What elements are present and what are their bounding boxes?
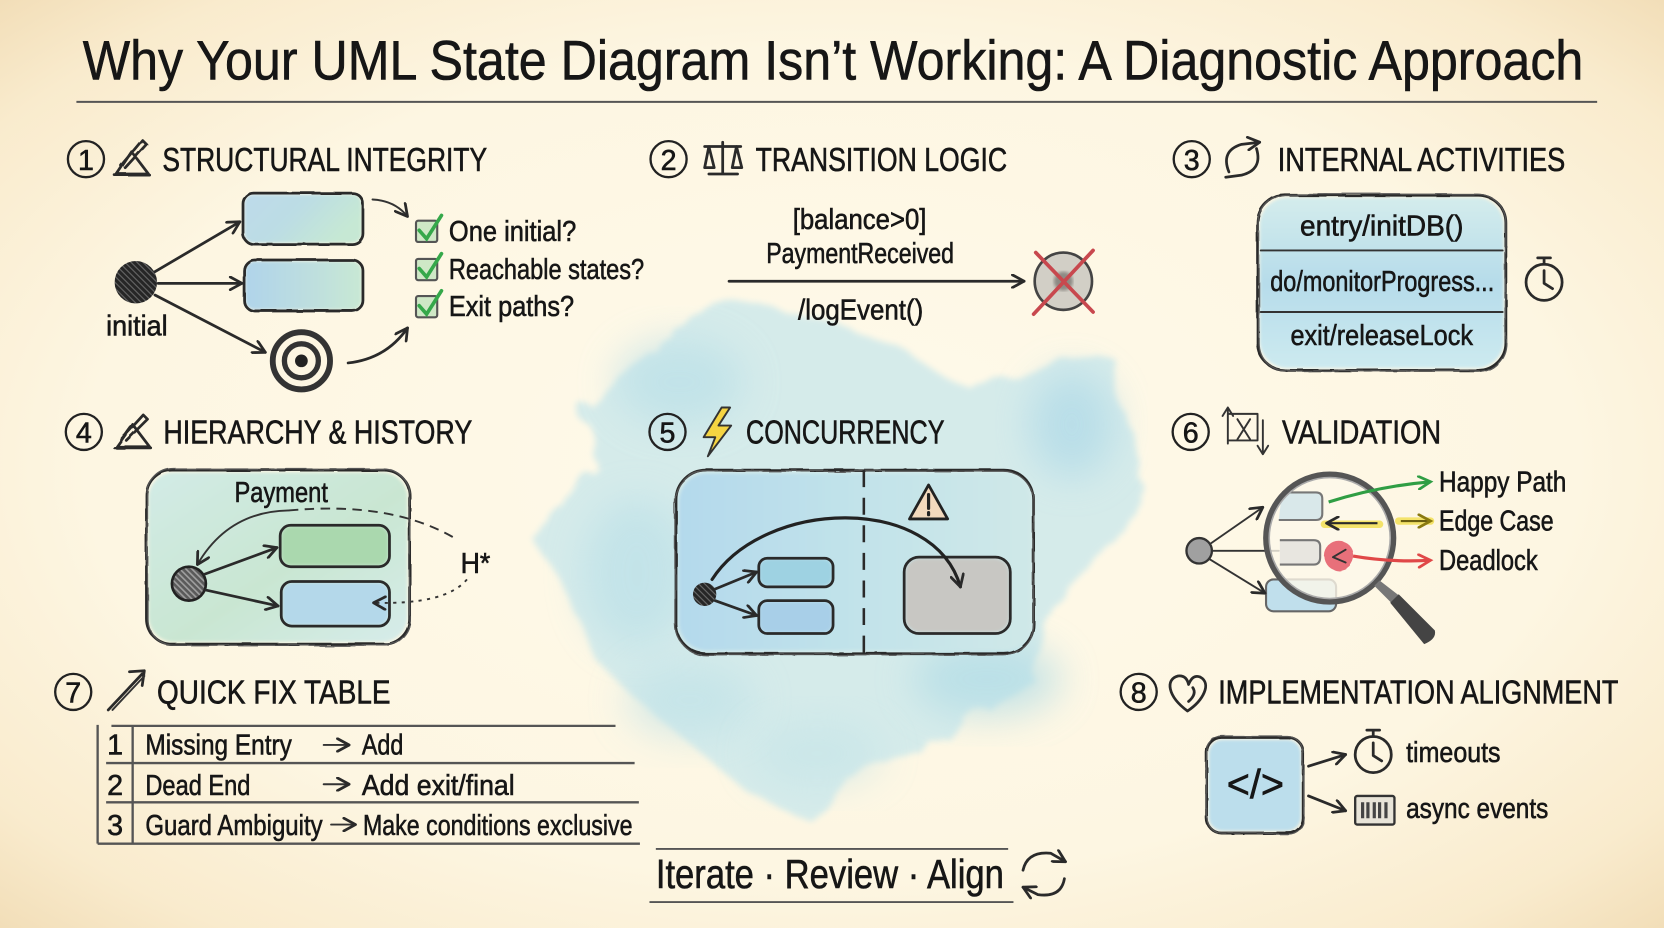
- code box: [1207, 736, 1303, 833]
- heading 4: HIERARCHY & HISTORY: [163, 414, 472, 451]
- panel 1: structural integrity: [68, 140, 644, 389]
- panel 7: quick fix table: [55, 671, 640, 844]
- activity box: exit/releaseLock: [1290, 320, 1474, 352]
- heading 6: [1173, 408, 1441, 454]
- fix table: 2: [107, 770, 123, 802]
- checklist: One initial?: [449, 216, 576, 248]
- activity box: do/monitorProgress...: [1270, 266, 1494, 298]
- fix table: 3: [107, 810, 123, 842]
- checklist: Exit paths?: [449, 291, 574, 323]
- panel 6: validation: [1173, 408, 1566, 644]
- guard text and arrow: [729, 204, 1024, 326]
- async events item: async events: [1406, 793, 1548, 825]
- composite state: [146, 469, 490, 645]
- activity box: [1258, 194, 1506, 371]
- heading 1: [68, 140, 487, 178]
- panel 2: transition logic: [651, 141, 1093, 326]
- timeouts item: timeouts: [1406, 737, 1501, 769]
- fix table: 1: [107, 730, 123, 762]
- icon: blocked state: [1034, 250, 1093, 314]
- icon: warning: [909, 485, 948, 519]
- parallel region box: [675, 470, 1034, 655]
- heading 5: 5: [660, 418, 675, 450]
- panel 8: implementation alignment: [1121, 674, 1618, 833]
- code box: </>: [1227, 761, 1284, 807]
- state diagram: [106, 193, 408, 389]
- heading 5: CONCURRENCY: [746, 414, 945, 451]
- path arrows and labels: [1324, 466, 1566, 577]
- panel 3: internal activities: [1174, 141, 1565, 371]
- fix table: Missing Entry: [145, 730, 292, 762]
- guard text and arrow: PaymentReceived: [766, 238, 954, 270]
- heading 5: [649, 408, 945, 456]
- heading 2: [651, 141, 1007, 178]
- composite state: Payment: [235, 477, 328, 509]
- fix table: Add: [362, 730, 403, 762]
- magnified path diagram: [1186, 474, 1435, 644]
- heading 6: 6: [1183, 418, 1199, 450]
- heading 4: [66, 414, 472, 451]
- composite state: H*: [461, 548, 490, 580]
- path arrows and labels: Happy Path: [1439, 466, 1566, 498]
- fix table: Make conditions exclusive: [363, 810, 632, 842]
- heading 4: 4: [76, 418, 92, 450]
- path arrows and labels: Edge Case: [1439, 506, 1554, 538]
- heading 3: 3: [1184, 145, 1200, 177]
- path arrows and labels: Deadlock: [1439, 545, 1538, 577]
- fix table: Guard Ambiguity: [145, 810, 323, 842]
- heading 1: STRUCTURAL INTEGRITY: [162, 141, 487, 178]
- activity box: entry/initDB(): [1300, 211, 1463, 243]
- guard text and arrow: /logEvent(): [798, 294, 923, 326]
- timeouts item: [1308, 730, 1501, 773]
- heading 2: TRANSITION LOGIC: [756, 141, 1007, 178]
- footer: iterate review align: Iterate · Review · Align: [656, 851, 1004, 897]
- fix table: Add exit/final: [362, 770, 515, 802]
- guard text and arrow: [balance>0]: [793, 204, 926, 236]
- watercolor wash behind centre: [531, 299, 1142, 819]
- heading 7: 7: [65, 678, 81, 710]
- heading 3: INTERNAL ACTIVITIES: [1278, 141, 1565, 178]
- checklist: [416, 215, 644, 323]
- fix table: [98, 725, 640, 844]
- async events item: [1308, 793, 1548, 825]
- heading 8: 8: [1131, 678, 1147, 710]
- heading 2: 2: [661, 145, 677, 177]
- heading 1: 1: [78, 145, 94, 177]
- panel 5: concurrency: [649, 408, 1034, 655]
- icon: cycle: [1023, 853, 1065, 895]
- icon: stopwatch: [1526, 258, 1562, 300]
- fix table: Dead End: [145, 770, 250, 802]
- heading 3: [1174, 141, 1565, 178]
- heading 7: [55, 671, 391, 711]
- heading 6: VALIDATION: [1282, 414, 1441, 451]
- heading 7: QUICK FIX TABLE: [157, 674, 391, 711]
- checklist: Reachable states?: [449, 254, 644, 286]
- panel 4: hierarchy and history: [66, 414, 490, 645]
- state diagram: initial: [106, 310, 168, 342]
